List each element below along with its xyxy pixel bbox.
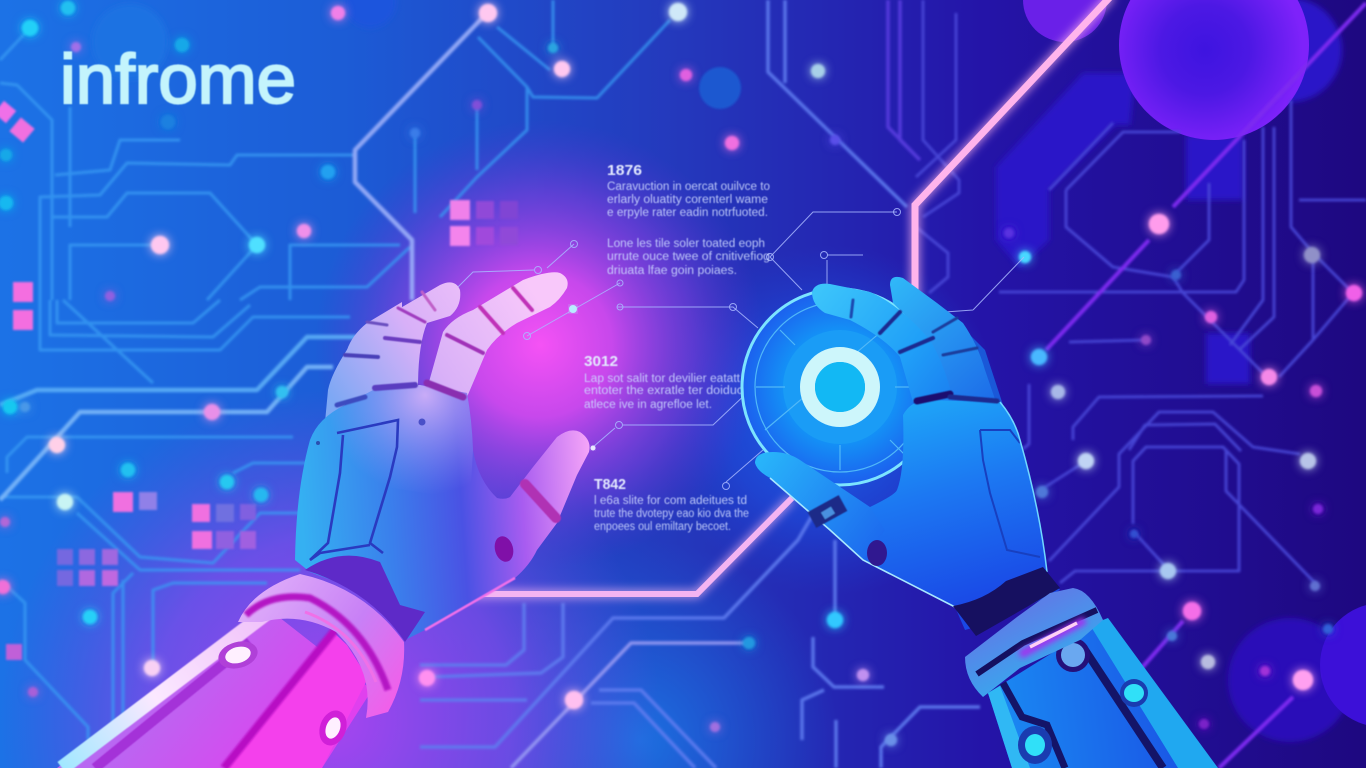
palm and thumb <box>755 400 1060 630</box>
text block: 3012: atlece ive in agrefloe let. <box>584 399 712 411</box>
title: infrome <box>60 40 296 118</box>
wrist screw <box>867 540 887 566</box>
text block: T842: trute the dvotepy eao kio dva the <box>594 508 749 520</box>
cuff <box>238 574 404 718</box>
palm <box>295 385 590 640</box>
wrist joint <box>953 567 1060 636</box>
text block: 1876 <box>607 163 770 219</box>
right robotic arm <box>755 277 1218 768</box>
wrist joint <box>305 556 425 642</box>
callout connector lines <box>458 208 1024 490</box>
finger joints <box>812 300 997 520</box>
cuff <box>965 588 1103 697</box>
finger joints <box>337 288 556 518</box>
glowing disc <box>742 289 938 485</box>
text block: 1876: erlarly oluatity corenterl wame <box>607 194 768 206</box>
text block: second paragraph: driuata lfae goin poiaes. <box>607 265 737 277</box>
text block: 1876: Caravuction in oercat ouilvce to <box>607 181 770 193</box>
text block: T842: l e6a slite for com adeitues td <box>594 495 747 507</box>
fingers <box>812 277 1003 405</box>
text block: 1876: e erpyle rater eadin notrfuoted. <box>607 207 768 219</box>
text block: 3012 <box>584 354 751 411</box>
circuit node squares <box>0 101 518 660</box>
glowing pink traces <box>470 0 1112 594</box>
text block: 3012: 3012 <box>584 354 618 370</box>
forearm <box>988 618 1218 768</box>
text block: 3012: entoter the exratle ter doiduca <box>584 385 751 397</box>
text block: T842 <box>594 477 749 533</box>
text block: 1876: 1876 <box>607 163 642 179</box>
text block: second paragraph: Lone les tile soler toated eoph <box>607 238 765 250</box>
left robotic arm <box>57 272 590 768</box>
text block: T842: T842 <box>594 477 626 493</box>
text block: T842: enpoees oul emiltary becoet. <box>594 521 731 533</box>
wrist screw <box>492 534 516 564</box>
forearm <box>57 610 372 768</box>
text block: second paragraph <box>607 238 770 277</box>
text block: second paragraph: urrute ouce twee of cnitivefiog <box>607 251 770 263</box>
fingers <box>325 272 568 422</box>
text block: 3012: Lap sot salit tor devilier eatatt <box>584 373 741 385</box>
